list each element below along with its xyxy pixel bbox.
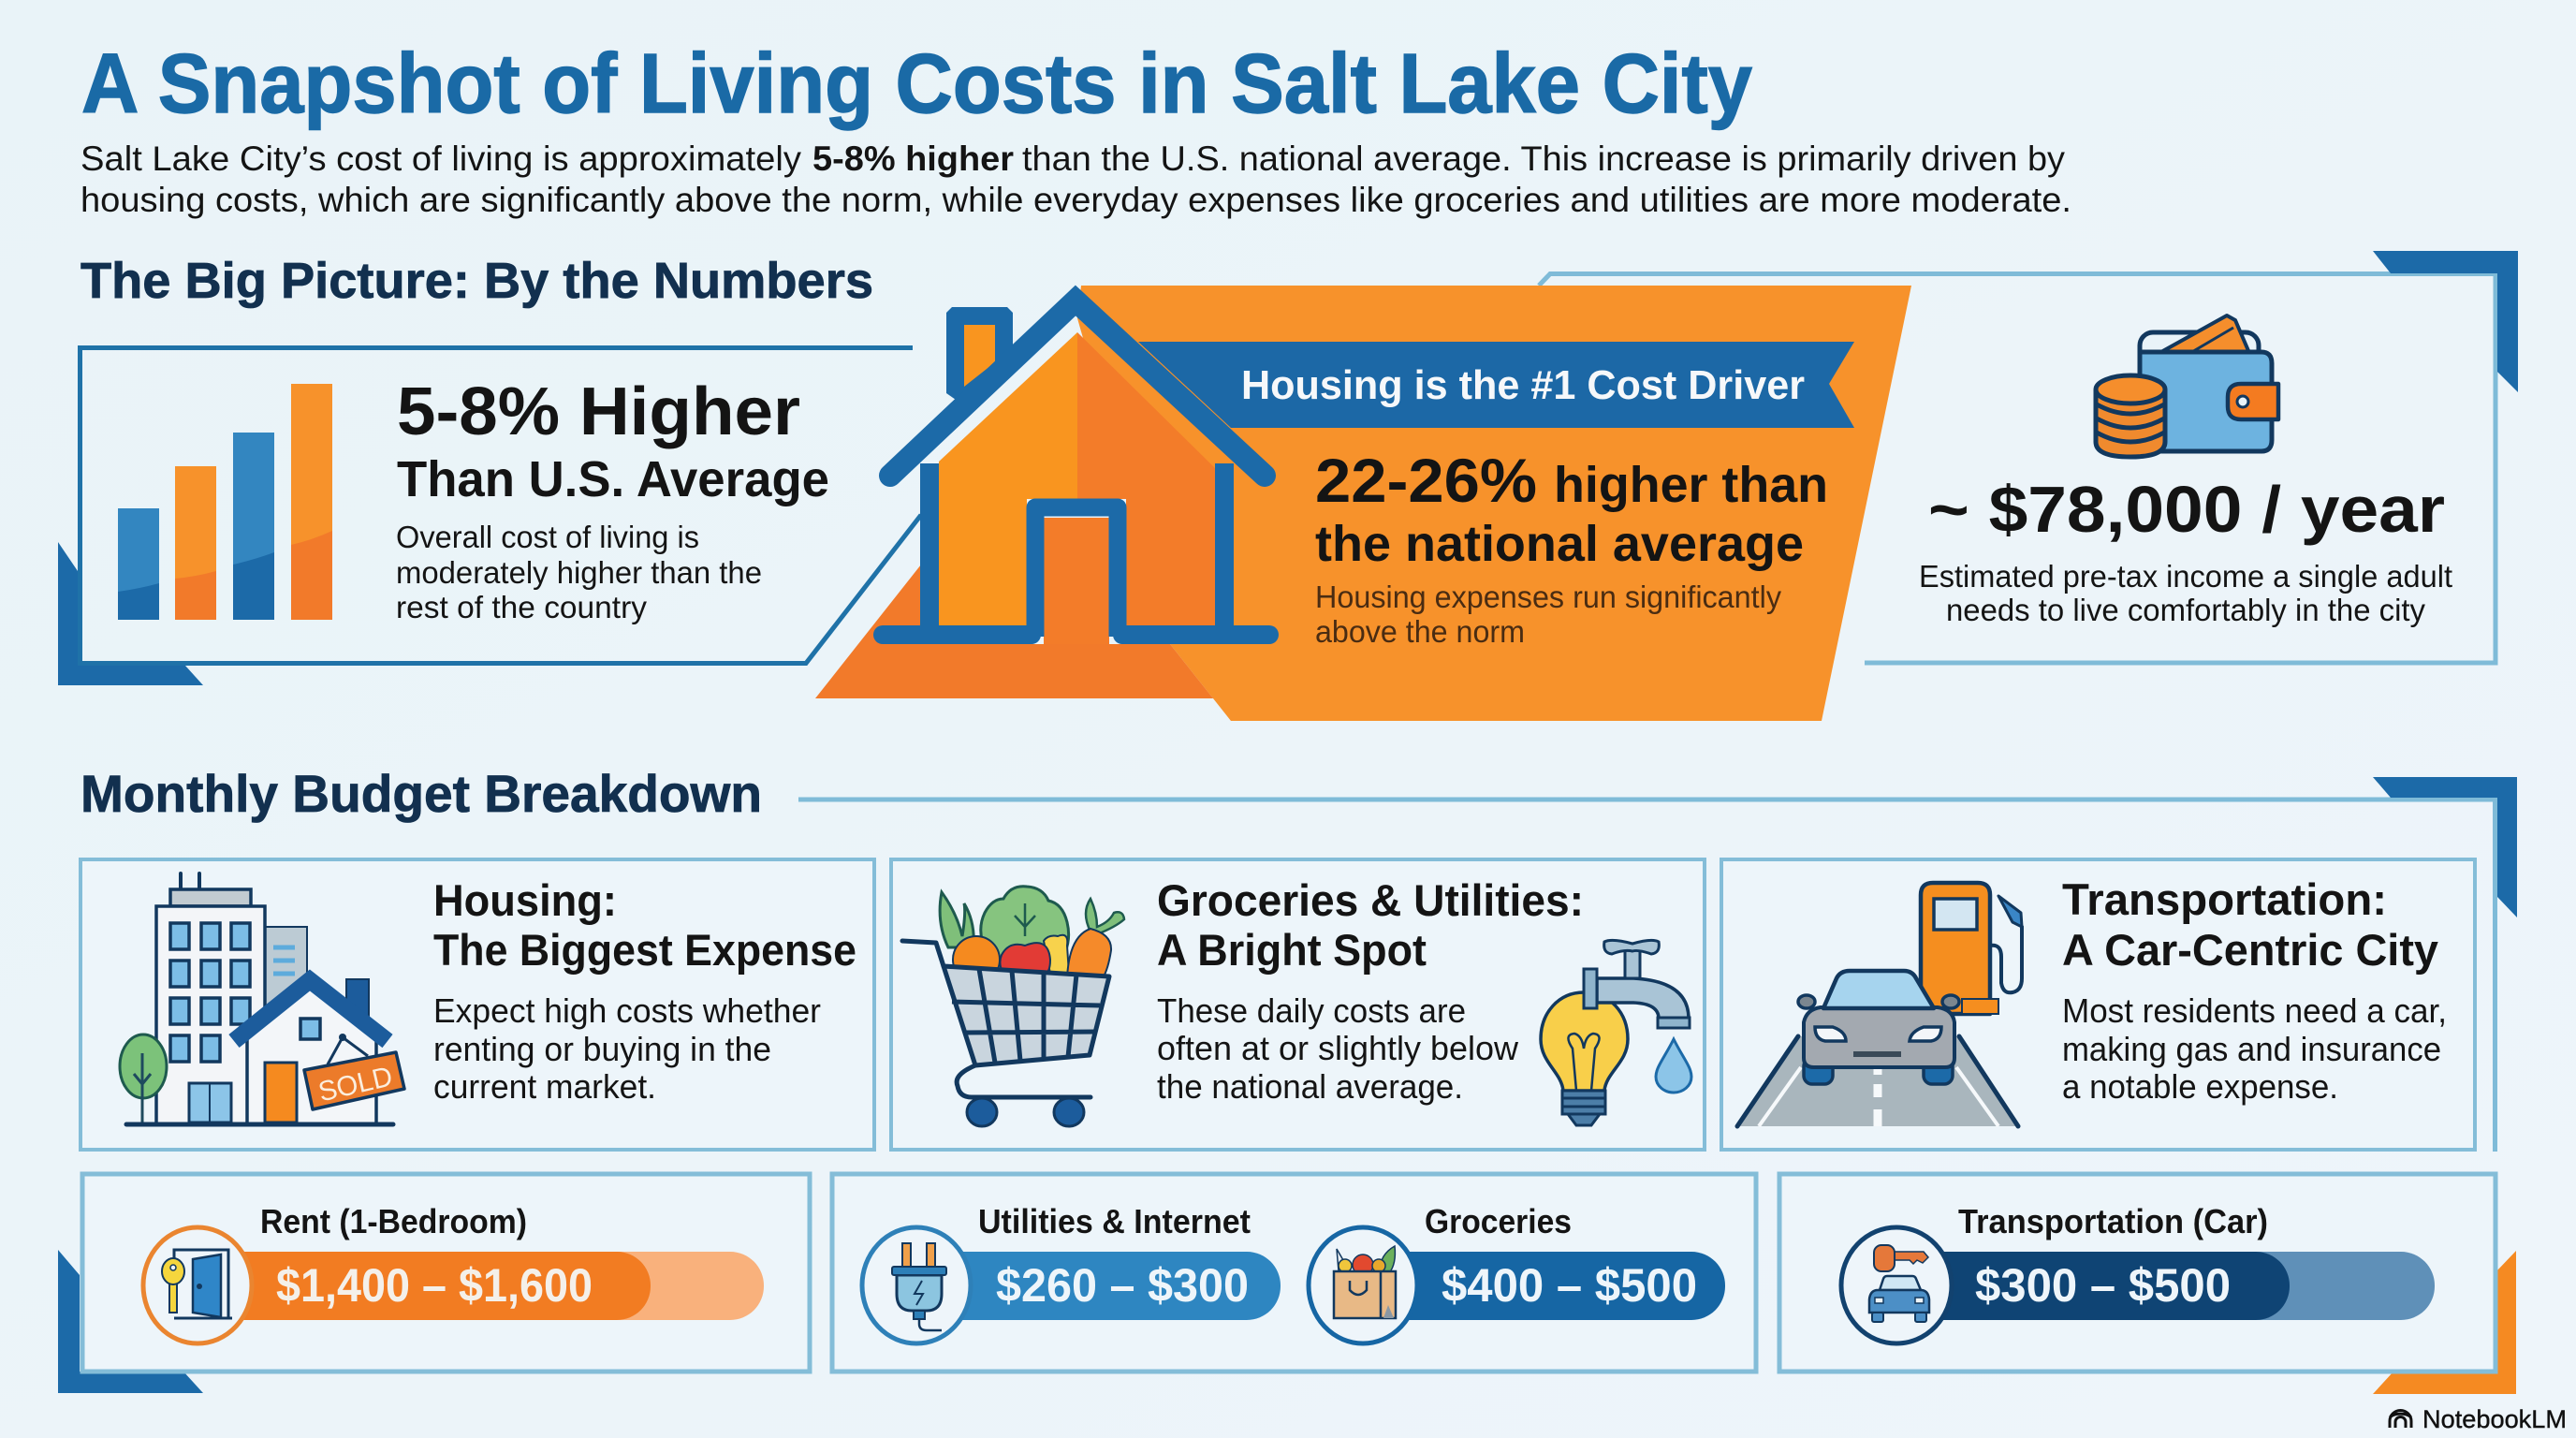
icon: plug — [862, 1227, 971, 1343]
panel: utilities and groceries — [832, 1174, 1756, 1372]
icon: grocery bag — [1309, 1227, 1417, 1343]
housing stat text: above the norm — [1315, 614, 1525, 649]
corner accent: bottom left — [58, 1250, 203, 1393]
housing stat text: Housing expenses run significantly — [1315, 580, 1781, 614]
card: housing — [80, 859, 874, 1150]
card text: making gas and insurance — [2062, 1030, 2441, 1068]
label: groceries: Groceries — [1425, 1202, 1572, 1240]
panel: overall cost frame — [58, 348, 921, 685]
card text: a notable expense. — [2062, 1067, 2338, 1106]
panel: housing orange — [815, 286, 1911, 721]
intro text: 5-8% higher — [812, 139, 1014, 178]
stat: 5-8% higher: moderately higher than the — [396, 555, 762, 590]
housing stat text — [1315, 446, 1828, 649]
intro text: housing costs, which are significantly above the norm, while everyday expenses like groceries and utilities are more moderate. — [80, 181, 2071, 219]
bar: transportation range — [1896, 1252, 2435, 1320]
bar chart — [118, 384, 332, 620]
intro text: Salt Lake City’s cost of living is approximately — [80, 139, 802, 178]
stat: 5-8% higher — [396, 374, 829, 624]
icon: car and key — [1841, 1227, 1952, 1343]
card text: the national average. — [1157, 1067, 1463, 1106]
intro text — [80, 139, 2071, 219]
card text: renting or buying in the — [433, 1030, 771, 1068]
stat: 5-8% higher: Overall cost of living is — [396, 520, 699, 554]
icon: wallet and coins — [2096, 315, 2278, 457]
stat: 5-8% higher: Than U.S. Average — [397, 451, 829, 507]
corner accent: bottom right — [2373, 1251, 2516, 1394]
banner — [1138, 342, 1854, 428]
stat: 5-8% higher: 5-8% Higher — [397, 374, 800, 449]
card text: Housing: — [433, 875, 617, 925]
bar: rent range: $1,400 – $1,600 — [276, 1259, 593, 1312]
housing stat text: 22-26% — [1315, 446, 1537, 515]
card text: Transportation: — [2062, 874, 2387, 924]
icon: shopping cart — [902, 887, 1124, 1126]
card text: Expect high costs whether — [433, 991, 821, 1030]
icon: gas pump and car — [1737, 883, 2022, 1126]
icon: door and key — [143, 1227, 252, 1343]
stat: income: needs to live comfortably in the city — [1946, 593, 2425, 627]
label: Transportation (Car) — [1958, 1202, 2268, 1240]
card text — [1157, 875, 1584, 1106]
bar: rent range — [198, 1252, 764, 1320]
stat: income — [1919, 473, 2452, 627]
stat: income: ~ $78,000 / year — [1928, 473, 2445, 546]
label: Rent (1-Bedroom) — [260, 1202, 527, 1240]
bar: utilities range — [916, 1252, 1281, 1320]
stat: 5-8% higher: rest of the country — [396, 590, 647, 624]
card text: Most residents need a car, — [2062, 991, 2447, 1030]
icon: house — [873, 301, 1279, 644]
icon: light bulb and faucet — [1541, 940, 1691, 1125]
card text — [2062, 874, 2447, 1106]
stat: income: Estimated pre-tax income a single adult — [1919, 559, 2452, 594]
intro text: than the U.S. national average. This increase is primarily driven by — [1022, 139, 2065, 178]
card: groceries and utilities — [891, 859, 1705, 1150]
card text — [433, 875, 856, 1106]
housing stat text: the national average — [1315, 516, 1804, 572]
label: utilities: Utilities & Internet — [978, 1202, 1251, 1240]
bar: transportation range: $300 – $500 — [1975, 1259, 2231, 1312]
panel: income frame — [1539, 251, 2518, 663]
bar: groceries range: $400 – $500 — [1442, 1259, 1697, 1312]
heading: monthly budget: Monthly Budget Breakdown — [80, 764, 762, 823]
icon: buildings with sold sign — [120, 873, 404, 1124]
card: transportation — [1721, 859, 2475, 1150]
bar: groceries range — [1363, 1252, 1725, 1320]
card text: A Bright Spot — [1157, 925, 1427, 975]
panel: transportation cost — [1779, 1174, 2496, 1372]
card text: A Car-Centric City — [2062, 925, 2438, 975]
title: A Snapshot of Living Costs in Salt Lake City — [81, 37, 1752, 131]
card text: The Biggest Expense — [433, 925, 856, 975]
logo: NotebookLM: NotebookLM — [2422, 1405, 2567, 1433]
card text: Groceries & Utilities: — [1157, 875, 1584, 925]
icon: buildings with sold sign: SOLD — [315, 1061, 395, 1108]
bar: utilities range: $260 – $300 — [996, 1259, 1249, 1312]
card text: often at or slightly below — [1157, 1029, 1519, 1067]
housing stat text: higher than — [1554, 457, 1828, 513]
panel: rent — [82, 1174, 810, 1372]
banner: Housing is the #1 Cost Driver — [1241, 362, 1805, 408]
heading: the big picture: The Big Picture: By the Numbers — [80, 253, 873, 309]
card text: These daily costs are — [1157, 991, 1466, 1030]
section frame: monthly budget — [798, 777, 2517, 1152]
card text: current market. — [433, 1067, 656, 1106]
